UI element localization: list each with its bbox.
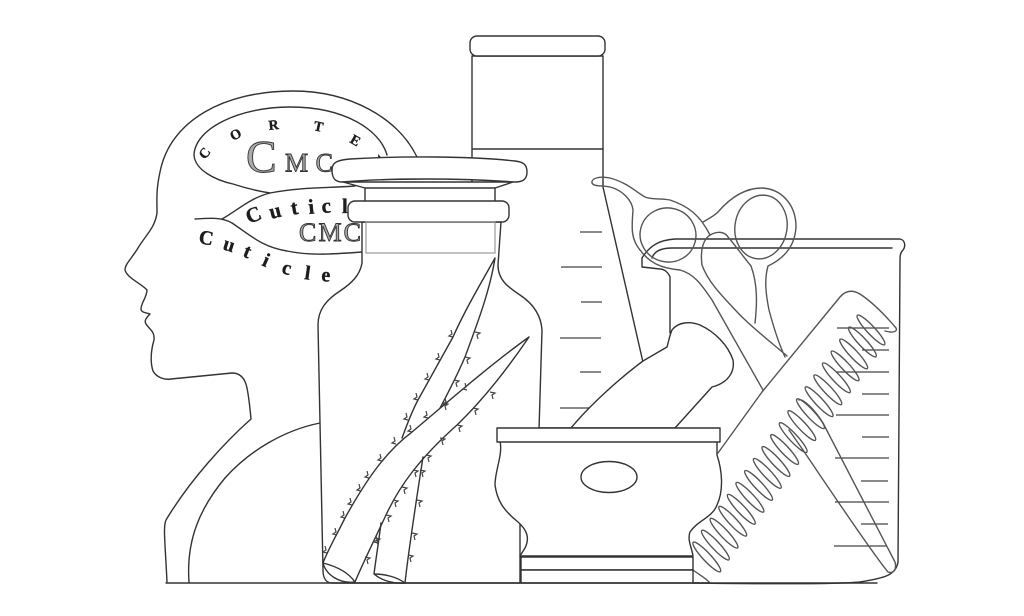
cuticle lobe [195, 193, 362, 254]
mortar rim [497, 428, 720, 442]
inner shoulder curve [189, 423, 320, 582]
beaker inner rim [652, 248, 892, 258]
icon: comb [690, 291, 896, 583]
scissors right ring [730, 191, 792, 263]
text: CMC small letters: MC [285, 148, 333, 178]
flask ticks [560, 232, 602, 408]
icon: medicine bottle with stopper [318, 157, 542, 583]
flask body [472, 56, 658, 428]
aloe thorns [323, 330, 495, 564]
icon: mortar [495, 428, 722, 583]
stopper neck [365, 186, 495, 202]
mortar label oval [581, 462, 637, 492]
icon: pestle [571, 323, 733, 428]
leaf base [323, 563, 355, 582]
comb spine [718, 291, 896, 453]
text: lower Cuticle: Cuticle [197, 226, 331, 287]
text: CMC second: CMC [299, 218, 361, 247]
bottle lip [348, 201, 509, 222]
scissors left handle [592, 177, 763, 390]
beaker outline [642, 239, 905, 584]
mortar base [521, 557, 693, 570]
icon: glass beaker [642, 239, 905, 584]
beaker ticks [834, 328, 889, 546]
comb teeth [690, 313, 888, 583]
scissor blade behind comb [789, 400, 896, 573]
bottle body [318, 222, 542, 583]
rear leaf [402, 258, 495, 438]
icon: tall graduated flask [470, 36, 658, 428]
flask band [472, 148, 603, 150]
head and shoulders outline [125, 91, 417, 582]
icon: head silhouette with hair structure [125, 91, 417, 582]
bottle inner neck [366, 222, 495, 253]
text: CORTEX: CORTEX [196, 118, 386, 170]
mortar bowl [495, 441, 722, 556]
stopper cap [343, 182, 513, 188]
text: upper Cuticle: Cuticl [242, 193, 348, 229]
text: CMC large: C [246, 131, 277, 182]
scissors right handle [701, 188, 796, 357]
ground line [166, 582, 877, 584]
icon: scissors [592, 177, 796, 390]
second leaf [323, 337, 529, 582]
cortex lobe [194, 107, 387, 193]
flask lip [470, 36, 605, 56]
icon: aloe vera leaves [323, 258, 529, 583]
third leaf [374, 457, 423, 583]
scissors left ring [634, 202, 702, 268]
